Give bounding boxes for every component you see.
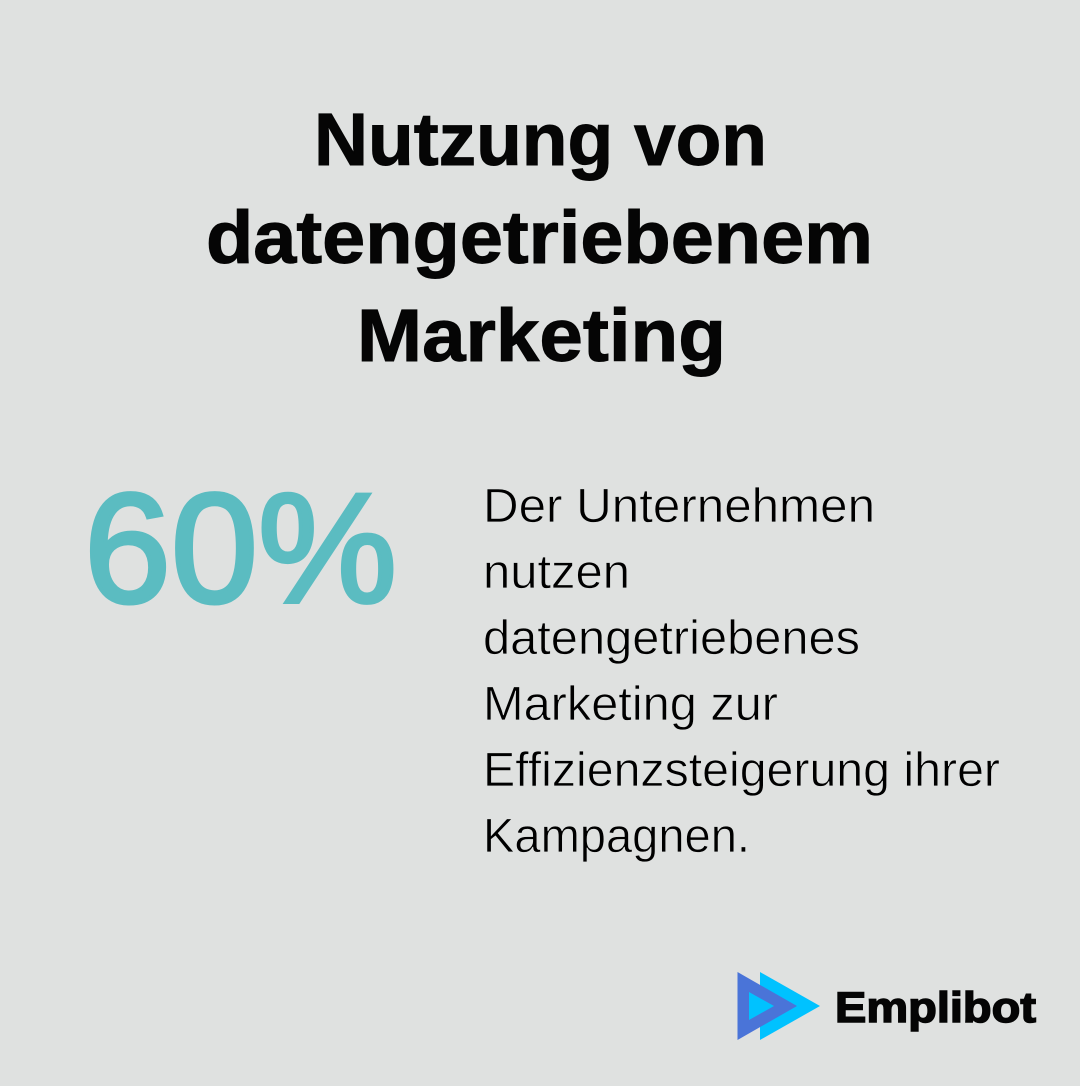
description text <box>483 480 1000 863</box>
description text: Kampagnen. <box>483 810 750 863</box>
title: datengetriebenem <box>206 196 873 279</box>
statistic: 60%: 60% <box>84 462 397 636</box>
description text: nutzen <box>483 546 630 599</box>
description text: datengetriebenes <box>483 612 860 665</box>
logo wordmark: Emplibot <box>835 984 1036 1032</box>
description text: Effizienzsteigerung ihrer <box>483 744 1000 797</box>
title <box>206 98 873 377</box>
icon: play triangles <box>738 972 820 1040</box>
title: Marketing <box>357 294 726 377</box>
description text: Der Unternehmen <box>483 480 875 533</box>
logo: Emplibot <box>738 972 1036 1040</box>
description text: Marketing zur <box>483 678 778 731</box>
title: Nutzung von <box>314 98 767 181</box>
